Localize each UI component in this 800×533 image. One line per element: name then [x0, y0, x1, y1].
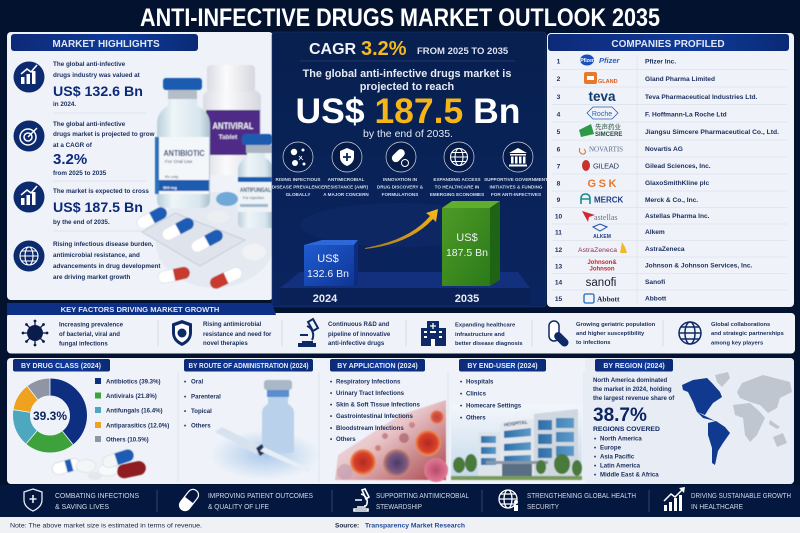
row 7 Gilead	[557, 160, 711, 171]
antifungal vial: For Injection	[243, 196, 264, 200]
row 4 Roche: 4	[557, 112, 561, 118]
highlight 4: Rising infectious disease burden,	[53, 241, 154, 248]
route list: Parenteral	[191, 394, 221, 400]
row 15 Abbott: Abbott	[645, 296, 667, 302]
bar chart: 2024 vs 2035	[280, 201, 530, 305]
highlight 2: at a CAGR of	[53, 142, 93, 149]
bar 2035: 187.5 Bn	[446, 247, 488, 259]
driver: infectious disease: DISEASE PREVALENCE	[272, 184, 324, 190]
heading: by region: BY REGION (2024)	[603, 363, 665, 370]
driver: infectious disease: RISING INFECTIOUS	[276, 177, 320, 182]
route list: Topical	[191, 408, 212, 415]
highlight 3: US$ 187.5 Bn	[53, 200, 143, 216]
region text: •	[594, 472, 596, 478]
factor: prevalence: of bacterial, viral and	[59, 331, 120, 338]
section: key factors	[7, 303, 795, 354]
factor: R&D: pipeline of innovative	[328, 331, 391, 338]
row 11 Alkem: ALKEM	[593, 234, 611, 240]
antiviral bottle	[203, 65, 261, 175]
donut chart	[14, 378, 78, 444]
row 6 Novartis	[557, 146, 683, 154]
row 14 Sanofi: 14	[555, 280, 562, 286]
row 2 Gland: GLAND	[598, 79, 618, 85]
forecast text: US$ 187.5 Bn	[296, 91, 520, 131]
factor: prevalence: fungal infections	[59, 340, 108, 348]
antibiotic vial: ANTIBIOTIC	[164, 148, 204, 158]
factor: geriatric: Growing geriatric population	[576, 322, 656, 328]
region text: North America	[600, 436, 642, 442]
row 14 Sanofi: sanofi	[586, 277, 616, 289]
row 6 Novartis: 6	[557, 146, 561, 154]
impact: patient outcomes: IMPROVING PATIENT OUTCOMES	[208, 491, 313, 500]
factor: collaboration: and strategic partnerships	[711, 331, 784, 337]
factor: infrastructure: infrastructure and	[455, 332, 505, 338]
row 10 Astellas	[555, 211, 710, 222]
impact: patient outcomes: & QUALITY OF LIFE	[208, 502, 269, 511]
legend: Antiparasitics (12.0%)	[106, 422, 169, 430]
source: Transparency Market Research	[365, 522, 465, 530]
row 10 Astellas: astellas	[594, 213, 618, 222]
route list	[184, 378, 221, 430]
factor: infrastructure	[421, 321, 523, 347]
row 11 Alkem: 11	[555, 230, 562, 236]
forecast text: projected to reach	[360, 81, 454, 93]
forecast text: The global anti-infective drugs market is	[303, 68, 511, 80]
row 15 Abbott: Abbott	[597, 294, 620, 304]
application list: •	[330, 425, 332, 432]
row 5 Simcere: 5	[557, 129, 561, 136]
application list: •	[330, 402, 332, 408]
legend: Antivirals (21.8%)	[106, 393, 157, 400]
application list: Others	[336, 436, 356, 443]
row 9 Merck: Merck & Co., Inc.	[645, 197, 698, 204]
segment: by region	[585, 358, 794, 484]
row 5 Simcere: 先声药业	[595, 122, 622, 131]
factor: collaboration: among key players	[711, 340, 763, 346]
row 10 Astellas: Astellas Pharma Inc.	[645, 213, 710, 220]
region text: Latin America	[600, 462, 641, 470]
factor: resistance: Rising antimicrobial	[203, 321, 262, 328]
highlight 3: The market is expected to cross	[53, 188, 149, 195]
impact: combating infections	[24, 489, 139, 511]
region text: the market in 2024, holding	[593, 386, 672, 393]
driver: innovation: FORMULATIONS	[382, 192, 418, 197]
region text: •	[594, 436, 596, 442]
bar 2024	[304, 240, 358, 286]
region text: Asia Pacific	[600, 454, 635, 460]
bar 2035: US$	[456, 232, 478, 244]
tablets	[207, 192, 266, 260]
row 12 AstraZeneca	[555, 242, 685, 254]
end-user list	[460, 378, 522, 422]
antibiotic vial	[155, 78, 210, 208]
heading: market highlights: MARKET HIGHLIGHTS	[52, 39, 160, 50]
row 10 Astellas: 10	[555, 214, 562, 220]
row 8 GSK	[557, 178, 709, 190]
row 2 Gland	[557, 72, 715, 85]
application list: Urinary Tract Infections	[336, 390, 405, 397]
route list: •	[184, 378, 186, 386]
impact: sustainable growth	[664, 487, 791, 511]
segment: by application	[330, 359, 448, 482]
impact: global health: SECURITY	[527, 502, 559, 511]
factor: resistance: novel therapies	[203, 340, 248, 347]
row 3 Teva: Teva Pharmaceutical Industries Ltd.	[645, 94, 758, 101]
impact: combating infections: & SAVING LIVES	[55, 502, 109, 511]
driver: government: FOR ANTI-INFECTIVES	[491, 192, 541, 197]
impact: global health: STRENGTHENING GLOBAL HEALTH	[527, 491, 636, 500]
application list: •	[330, 378, 332, 386]
end-user list: •	[460, 378, 462, 386]
row 4 Roche: Roche	[592, 111, 612, 118]
highlight 4: advancements in drug development	[53, 263, 161, 270]
end-user list: Homecare Settings	[466, 402, 522, 410]
highlight 4: are driving market growth	[53, 274, 130, 281]
highlight 1: drugs industry was valued at	[53, 72, 141, 79]
antiviral bottle: ANTIVIRAL	[212, 121, 254, 132]
donut chart: 39.3%	[33, 409, 67, 423]
segment: by drug class	[13, 359, 169, 480]
region text	[593, 377, 675, 478]
row 13 Johnson & Johnson: Johnson & Johnson Services, Inc.	[645, 262, 753, 270]
driver: antimicrobial resistance: RESISTANCE (AMR)	[324, 184, 368, 190]
driver: expanding access	[430, 142, 484, 197]
panel: companies profiled	[547, 33, 794, 307]
heading: companies profiled	[548, 34, 789, 51]
year labels: 2024	[313, 293, 338, 305]
row 3 Teva: teva	[588, 89, 616, 104]
heading: by route: BY ROUTE OF ADMINISTRATION (2024)	[188, 363, 308, 370]
heading: by drug class	[13, 359, 110, 372]
illustration: medicine bottles and capsules	[135, 65, 275, 291]
factor: prevalence: Increasing prevalence	[59, 322, 124, 328]
highlight 2	[14, 120, 155, 177]
factor: collaboration: Global collaborations	[711, 322, 770, 328]
heading: market highlights	[11, 34, 198, 51]
application list: Gastrointestinal Infections	[336, 413, 413, 420]
highlight 2: 3.2%	[53, 151, 87, 168]
CAGR headline: CAGR	[309, 41, 357, 58]
application list: •	[330, 413, 332, 420]
end-user list: Others	[466, 414, 486, 422]
route list: •	[184, 408, 186, 415]
region text: 38.7%	[593, 405, 647, 426]
region text: the largest revenue share of	[593, 395, 675, 402]
row 8 GSK: GSK	[588, 178, 617, 190]
row 8 GSK: 8	[557, 180, 561, 188]
illustration: vial and syringe	[210, 380, 320, 480]
bar 2024: 132.6 Bn	[307, 268, 349, 280]
row 9 Merck	[557, 194, 698, 204]
highlight 1	[14, 61, 143, 108]
region text: Europe	[600, 444, 622, 452]
row 5 Simcere: SIMCERE	[595, 132, 622, 138]
application list: Respiratory Infections	[336, 378, 401, 386]
row 11 Alkem: Alkem	[645, 229, 665, 236]
row 7 Gilead: 7	[557, 164, 561, 170]
region text: REGIONS COVERED	[593, 426, 660, 433]
CAGR headline: FROM 2025 TO 2035	[417, 46, 509, 57]
row 7 Gilead: GILEAD	[593, 162, 620, 170]
antibiotic vial: Rx only	[165, 174, 178, 179]
segment: by route	[184, 359, 320, 480]
row 1 Pfizer: Pfizer	[580, 58, 594, 64]
antifungal vial	[238, 134, 272, 228]
row 7 Gilead: Gilead Sciences, Inc.	[645, 163, 711, 170]
segment: by end-user	[451, 359, 582, 480]
illustration: hospital: HOSPITAL	[504, 420, 528, 428]
world map	[682, 372, 792, 465]
factor: R&D: anti-infective drugs	[328, 340, 385, 347]
highlight 1: in 2024.	[53, 101, 76, 108]
driver: innovation: INNOVATION IN	[383, 177, 418, 182]
driver: expanding access: EXPANDING ACCESS	[433, 177, 481, 182]
highlight 3: by the end of 2035.	[53, 219, 110, 226]
driver: government	[484, 142, 548, 197]
row 13 Johnson & Johnson: Johnson&	[587, 260, 617, 266]
illustration: pathogens	[335, 400, 448, 482]
forecast text: by the end of 2035.	[363, 128, 453, 140]
heading: companies profiled: COMPANIES PROFILED	[611, 39, 725, 50]
region text: •	[594, 454, 596, 460]
heading: by drug class: BY DRUG CLASS (2024)	[21, 363, 101, 370]
highlight 1: The global anti-infective	[53, 61, 126, 68]
capsules	[135, 205, 244, 291]
route list: Oral	[191, 378, 204, 386]
application list: Bloodstream Infections	[336, 425, 404, 432]
row 8 GSK: GlaxoSmithKline plc	[645, 180, 709, 187]
application list: •	[330, 436, 332, 443]
row 15 Abbott: 15	[555, 296, 562, 303]
row 1 Pfizer: 1	[557, 58, 561, 66]
forecast text	[296, 68, 520, 140]
antiviral bottle: Tablet	[219, 134, 238, 141]
row 1 Pfizer	[557, 54, 676, 66]
row 5 Simcere: Jiangsu Simcere Pharmaceutical Co., Ltd.	[645, 129, 779, 136]
CAGR headline: 3.2%	[361, 38, 407, 60]
highlight 4	[14, 240, 161, 281]
impact: stewardship	[354, 489, 469, 511]
panel: market highlights	[7, 32, 275, 300]
row 6 Novartis: NOVARTIS	[589, 146, 623, 154]
panel: centre forecast	[272, 32, 548, 307]
antifungal vial: ANTIFUNGAL	[240, 188, 271, 194]
row 1 Pfizer: Pfizer Inc.	[645, 58, 676, 66]
factor: infrastructure: Expanding healthcare	[455, 322, 516, 328]
factor: collaboration	[679, 322, 784, 346]
impact: sustainable growth: IN HEALTHCARE	[691, 502, 743, 511]
CAGR headline	[309, 38, 509, 60]
region text: •	[594, 462, 596, 470]
highlight 4: antimicrobial resistance, and	[53, 252, 140, 259]
row 13 Johnson & Johnson: Johnson	[590, 266, 615, 272]
row 1 Pfizer: Pfizer	[599, 56, 621, 65]
driver: antimicrobial resistance	[323, 142, 369, 197]
driver: expanding access: EMERGING ECONOMIES	[430, 192, 484, 197]
driver: infectious disease	[272, 142, 324, 197]
driver: antimicrobial resistance: A MAJOR CONCERN	[323, 192, 369, 197]
heading: key factors	[7, 303, 276, 315]
factor: infrastructure: better disease diagnosis	[455, 341, 523, 347]
region text: North America dominated	[593, 377, 668, 384]
key factors panel	[7, 313, 795, 354]
row 14 Sanofi	[555, 277, 665, 289]
row 9 Merck: 9	[557, 197, 561, 204]
heading: by end-user: BY END-USER (2024)	[467, 363, 538, 370]
factor: R&D	[299, 319, 391, 347]
row 3 Teva: 3	[557, 94, 561, 101]
year labels	[313, 293, 479, 305]
row 14 Sanofi: Sanofi	[645, 279, 665, 286]
source: Source:	[335, 522, 359, 530]
driver: government: INITIATIVES & FUNDING	[490, 184, 543, 190]
legend	[95, 378, 169, 444]
row 12 AstraZeneca: 12	[555, 247, 562, 254]
driver: innovation	[377, 142, 424, 197]
footer	[0, 517, 800, 533]
factor: resistance	[172, 320, 272, 347]
highlight 1: US$ 132.6 Bn	[53, 84, 143, 100]
row 15 Abbott	[555, 294, 667, 304]
section: bottom impact strip	[0, 485, 800, 517]
end-user list: Hospitals	[466, 378, 494, 386]
antibiotic vial: 500 mg	[163, 185, 177, 190]
row 5 Simcere	[557, 122, 779, 138]
route list: Others	[191, 422, 211, 430]
highlight 2: drugs market is projected to grow	[53, 131, 155, 138]
row 4 Roche	[557, 107, 727, 119]
impact: stewardship: SUPPORTING ANTIMICROBIAL	[376, 491, 469, 500]
row 13 Johnson & Johnson	[555, 260, 753, 272]
row 6 Novartis: Novartis AG	[645, 146, 683, 153]
row 12 AstraZeneca: AstraZeneca	[645, 246, 685, 253]
end-user list: •	[460, 402, 462, 410]
row 4 Roche: F. Hoffmann-La Roche Ltd	[645, 112, 727, 118]
highlight 2: from 2025 to 2035	[53, 170, 107, 177]
driver: antimicrobial resistance: ANTIMICROBIAL	[328, 177, 365, 182]
factor: resistance: resistance and need for	[203, 331, 272, 338]
region text: Middle East & Africa	[600, 472, 659, 478]
growth arrow	[365, 209, 438, 249]
row 13 Johnson & Johnson: 13	[555, 264, 562, 270]
row 2 Gland: Gland Pharma Limited	[645, 76, 715, 83]
factor: geriatric	[549, 321, 656, 348]
factor: prevalence	[22, 320, 124, 348]
title: ANTI-INFECTIVE DRUGS MARKET OUTLOOK 2035	[140, 4, 660, 32]
heading: key factors: KEY FACTORS DRIVING MARKET GROWTH	[61, 305, 219, 314]
bar 2024: US$	[317, 253, 339, 265]
route list: •	[184, 394, 186, 400]
end-user list: •	[460, 390, 462, 398]
row 9 Merck: MERCK	[594, 196, 624, 204]
driver: innovation: DRUG DISCOVERY &	[377, 184, 424, 190]
section: segmentation	[7, 358, 794, 484]
year labels: 2035	[455, 293, 479, 305]
antibiotic vial: For Oral Use	[165, 159, 193, 165]
application list: Skin & Soft Tissue Infections	[336, 402, 420, 408]
legend: Others (10.5%)	[106, 436, 149, 444]
legend: Antifungals (16.4%)	[106, 408, 163, 414]
region text: •	[594, 444, 596, 452]
factor: geriatric: and higher susceptibility	[576, 331, 645, 337]
heading: by region	[595, 359, 673, 372]
row 2 Gland: 2	[557, 76, 561, 83]
end-user list: •	[460, 414, 462, 422]
highlight 2: The global anti-infective	[53, 121, 126, 128]
blister pack	[142, 213, 245, 266]
route list: •	[184, 422, 186, 430]
end-user list: Clinics	[466, 390, 487, 398]
driver: expanding access: TO HEALTHCARE IN	[435, 184, 480, 190]
bar 2035	[442, 201, 500, 286]
factor: R&D: Continuous R&D and	[328, 321, 390, 328]
footnote: Note: The above market size is estimated in terms of revenue.	[10, 522, 202, 530]
impact: global health	[499, 490, 636, 511]
factor: geriatric: to infections	[576, 340, 610, 346]
heading: by application: BY APPLICATION (2024)	[337, 363, 418, 370]
application list	[330, 378, 420, 443]
driver: infectious disease: GLOBALLY	[286, 192, 310, 197]
illustration: pills	[51, 448, 147, 480]
highlight 3	[14, 182, 149, 226]
impact: stewardship: STEWARDSHIP	[376, 502, 422, 511]
row 11 Alkem	[555, 224, 665, 240]
driver: government: SUPPORTIVE GOVERNMENT	[484, 177, 548, 182]
row 3 Teva	[557, 89, 758, 104]
impact: patient outcomes	[177, 487, 313, 513]
row 12 AstraZeneca: AstraZeneca	[578, 247, 617, 254]
application list: •	[330, 390, 332, 397]
legend: Antibiotics (39.3%)	[106, 378, 161, 386]
impact: combating infections: COMBATING INFECTIONS	[55, 491, 139, 500]
